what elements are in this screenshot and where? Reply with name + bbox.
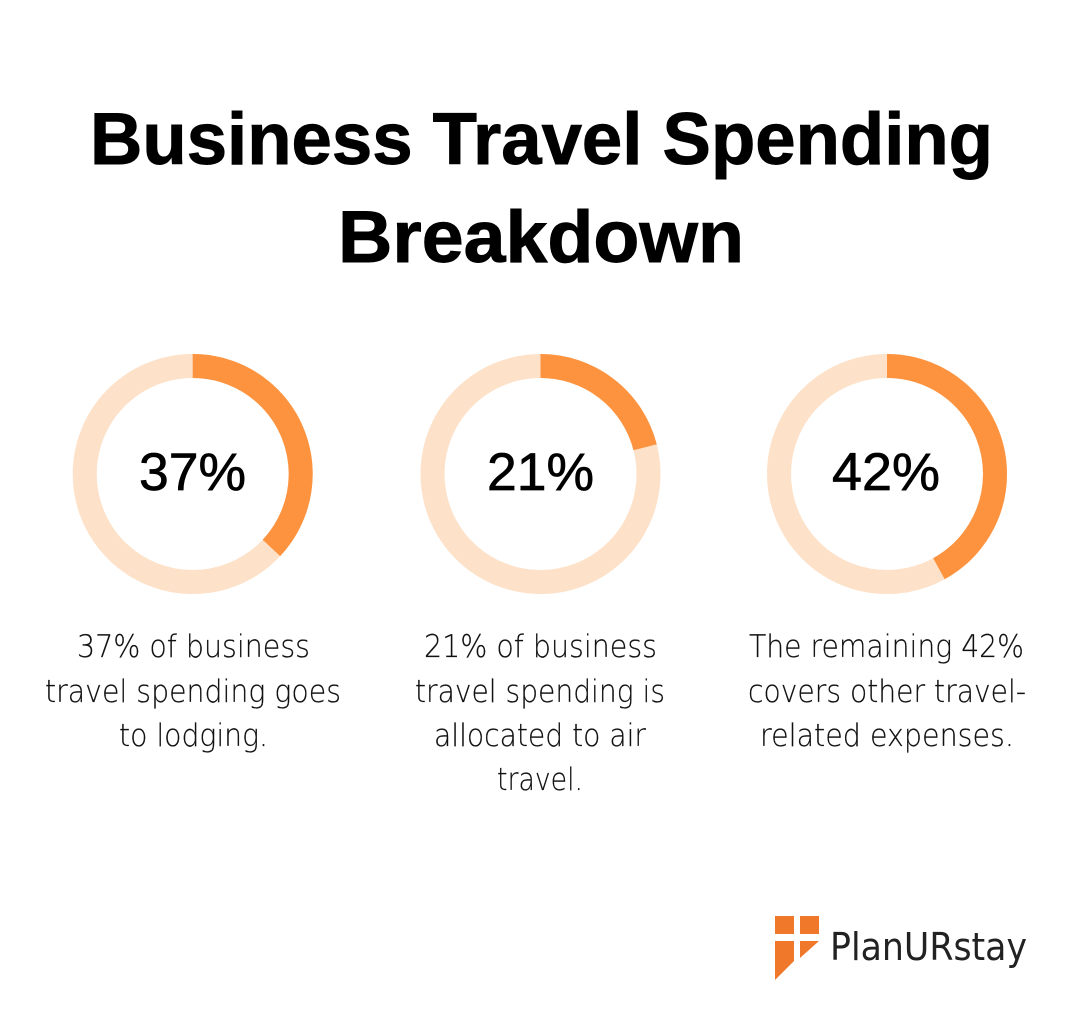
description: air travel: 21% of business bbox=[424, 629, 657, 665]
wordmark: PlanURstay bbox=[830, 925, 1027, 969]
description: lodging: travel spending goes bbox=[45, 674, 341, 710]
panel: other expenses bbox=[748, 366, 1026, 754]
title bbox=[90, 99, 993, 278]
panel: lodging bbox=[45, 366, 341, 754]
value: 21%: 21% bbox=[487, 443, 594, 502]
description: other expenses: covers other travel- bbox=[748, 674, 1026, 710]
value: 42%: 42% bbox=[832, 443, 940, 502]
title: Breakdown bbox=[338, 197, 744, 278]
description: lodging bbox=[45, 629, 341, 754]
description: air travel: travel spending is bbox=[415, 674, 665, 710]
donut chart: 37% bbox=[85, 366, 301, 582]
description: other expenses: The remaining 42% bbox=[749, 629, 1024, 665]
description: other expenses: related expenses. bbox=[760, 718, 1014, 754]
donut chart: 21% bbox=[432, 366, 648, 582]
panel: air travel bbox=[415, 366, 665, 798]
value: 37%: 37% bbox=[139, 443, 246, 502]
description: lodging: 37% of business bbox=[77, 629, 310, 665]
description: air travel: travel. bbox=[497, 762, 583, 798]
description: lodging: to lodging. bbox=[119, 718, 268, 754]
description: other expenses bbox=[748, 629, 1026, 754]
icon: orange logo mark bbox=[775, 916, 819, 980]
title: Business Travel Spending bbox=[90, 99, 993, 180]
description: air travel: allocated to air bbox=[434, 718, 646, 754]
description: air travel bbox=[415, 629, 665, 798]
logo: PlanURstay bbox=[775, 916, 1027, 980]
donut chart: 42% bbox=[779, 366, 995, 582]
